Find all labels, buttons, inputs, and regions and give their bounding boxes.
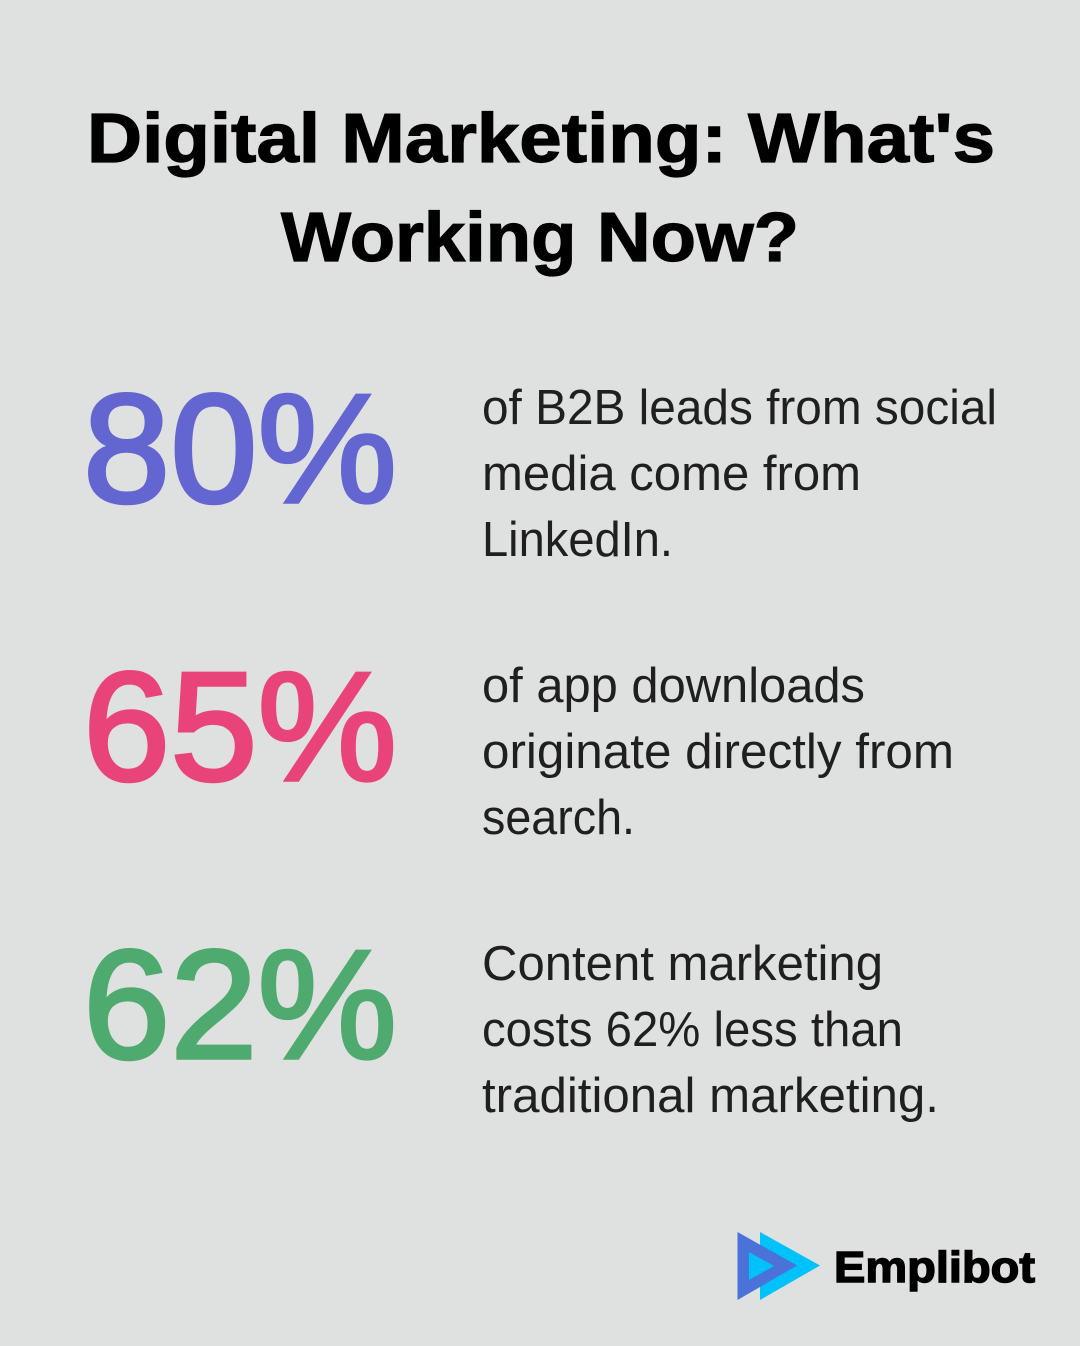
title: Working Now?	[281, 198, 799, 276]
text: content marketing description: Content marketing	[482, 937, 883, 991]
icon: play triangles	[738, 1232, 820, 1300]
text: search description	[482, 659, 954, 845]
text: LinkedIn description: of B2B leads from social	[482, 381, 997, 435]
number: 62%: 62%	[83, 918, 397, 1091]
text: search description: originate directly from	[482, 725, 954, 779]
number: 65%: 65%	[83, 640, 397, 813]
text: LinkedIn description	[482, 381, 997, 567]
number: 80%: 80%	[83, 362, 397, 535]
text: search description: of app downloads	[482, 659, 865, 713]
stat: 62% content marketing	[83, 918, 939, 1123]
stat: 80% LinkedIn	[83, 362, 997, 567]
text: LinkedIn description: LinkedIn.	[482, 513, 673, 567]
text: content marketing description: traditional marketing.	[482, 1069, 939, 1123]
title: Digital Marketing: What's	[87, 99, 995, 177]
title	[87, 99, 995, 276]
text: content marketing description: costs 62% less than	[482, 1003, 903, 1057]
text: LinkedIn description: media come from	[482, 447, 861, 501]
text: search description: search.	[482, 791, 635, 845]
text: content marketing description	[482, 937, 939, 1123]
wordmark: Emplibot	[834, 1243, 1035, 1292]
stat: 65% search	[83, 640, 954, 845]
logo: Emplibot	[738, 1232, 1035, 1300]
